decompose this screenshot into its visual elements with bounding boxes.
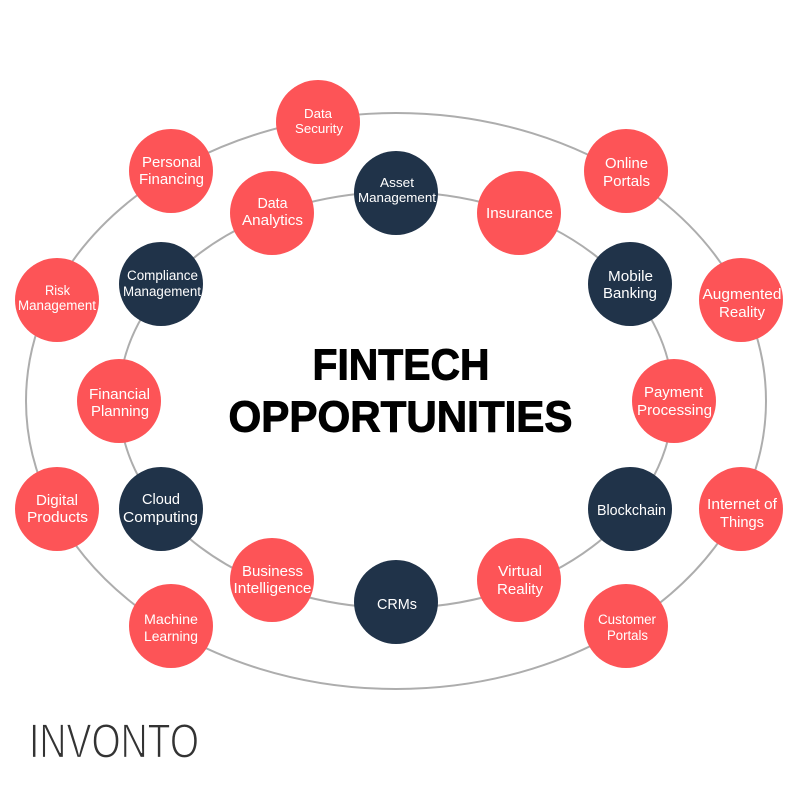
node: Mobile Banking: Banking (603, 285, 657, 302)
node: Personal Financing (129, 129, 213, 213)
node: Machine Learning: Machine (144, 611, 198, 627)
node: Online Portals: Portals (603, 173, 650, 190)
node: Cloud Computing (119, 467, 203, 551)
node: Compliance Management: Management (123, 284, 201, 299)
outer ring (26, 113, 766, 689)
node: Data Analytics: Analytics (242, 212, 303, 229)
title: OPPORTUNITIES (228, 392, 572, 442)
node: Machine Learning: Learning (144, 628, 198, 644)
node: Augmented Reality: Reality (719, 304, 765, 321)
inner ring (119, 192, 673, 608)
logo: INVONTO: INVONTO (29, 716, 199, 768)
node: Digital Products (15, 467, 99, 551)
node: Data Analytics: Data (258, 195, 288, 212)
node: Cloud Computing: Computing (123, 509, 198, 526)
node: Compliance Management (119, 242, 203, 326)
node: Augmented Reality: Augmented (702, 286, 782, 303)
node: Payment Processing: Payment (644, 384, 704, 401)
node: Financial Planning (77, 359, 161, 443)
node: Data Analytics (230, 171, 314, 255)
node: Augmented Reality (699, 258, 783, 342)
node: Online Portals (584, 129, 668, 213)
node: Customer Portals: Customer (598, 612, 656, 627)
node: Risk Management: Management (18, 298, 96, 313)
node: Blockchain: Blockchain (597, 502, 666, 519)
node: Business Intelligence: Business (242, 563, 303, 580)
node: Virtual Reality: Reality (497, 581, 543, 598)
node: Online Portals: Online (605, 155, 648, 172)
node: Data Security: Data (304, 106, 333, 121)
node: Financial Planning: Planning (91, 403, 149, 420)
node: Insurance (477, 171, 561, 255)
node: Customer Portals: Portals (607, 628, 648, 643)
node: Personal Financing: Personal (142, 154, 201, 171)
node: CRMs (354, 560, 438, 644)
node: Financial Planning: Financial (89, 386, 150, 403)
node: Asset Management (354, 151, 438, 235)
node: Asset Management: Management (358, 190, 436, 205)
node: CRMs: CRMs (377, 596, 417, 613)
node: Machine Learning (129, 584, 213, 668)
node: Risk Management (15, 258, 99, 342)
node: Mobile Banking (588, 242, 672, 326)
node: Compliance Management: Compliance (127, 268, 198, 283)
node: Data Security: Security (295, 121, 344, 136)
node: Customer Portals (584, 584, 668, 668)
node: Data Security (276, 80, 360, 164)
node: Personal Financing: Financing (139, 171, 204, 188)
node: Insurance: Insurance (486, 205, 553, 222)
title: FINTECH (312, 340, 490, 390)
node: Business Intelligence: Intelligence (234, 580, 312, 597)
node: Risk Management: Risk (45, 283, 70, 298)
node: Mobile Banking: Mobile (608, 268, 653, 285)
node: Internet of Things (699, 467, 783, 551)
node: Internet of Things: Things (720, 514, 764, 531)
node: Digital Products: Digital (36, 492, 78, 509)
title (228, 340, 572, 442)
node: Payment Processing (632, 359, 716, 443)
node: Asset Management: Asset (380, 175, 414, 190)
node: Payment Processing: Processing (637, 402, 712, 419)
node: Internet of Things: Internet of (707, 496, 778, 513)
node: Digital Products: Products (27, 509, 88, 526)
node: Virtual Reality: Virtual (498, 563, 542, 580)
node: Virtual Reality (477, 538, 561, 622)
node: Business Intelligence (230, 538, 314, 622)
node: Blockchain (588, 467, 672, 551)
node: Cloud Computing: Cloud (142, 491, 180, 508)
